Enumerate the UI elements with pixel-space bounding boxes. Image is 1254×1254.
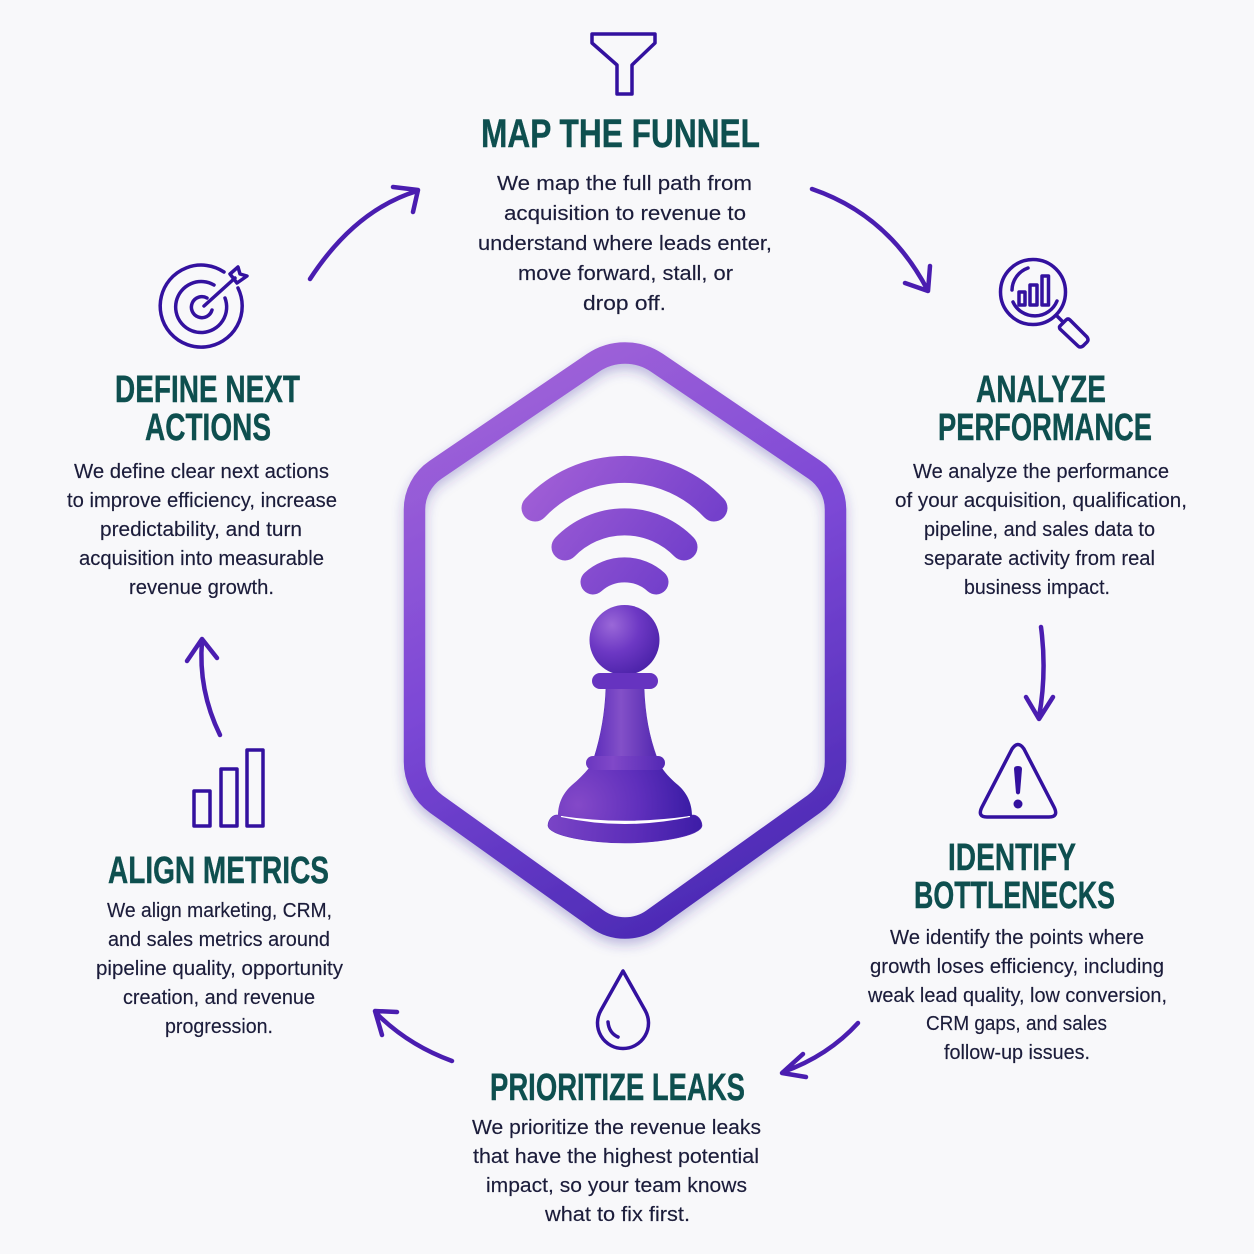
- text: analyze performance: separate activity from real: [924, 547, 1155, 570]
- text: align metrics: [96, 899, 344, 1038]
- text: identify bottlenecks: follow-up issues.: [944, 1041, 1090, 1064]
- text: map the funnel: drop off.: [583, 292, 666, 315]
- heading: identify bottlenecks: [914, 837, 1115, 917]
- text: map the funnel: move forward, stall, or: [518, 262, 733, 285]
- text: prioritize leaks: what to fix first.: [544, 1203, 690, 1226]
- text: align metrics: We align marketing, CRM,: [107, 899, 332, 922]
- heading: define next actions: DEFINE NEXT: [115, 369, 300, 411]
- icon: target with arrow: [160, 265, 247, 347]
- text: analyze performance: business impact.: [964, 576, 1110, 599]
- arrow: identify to prioritize: [782, 1023, 858, 1077]
- icon: funnel: [592, 34, 655, 94]
- icon: chess pawn: [548, 605, 702, 843]
- text: align metrics: creation, and revenue: [123, 986, 315, 1009]
- text: define next actions: predictability, and turn: [100, 518, 302, 541]
- text: identify bottlenecks: [867, 926, 1167, 1064]
- heading: map the funnel: MAP THE FUNNEL: [481, 112, 760, 156]
- text: map the funnel: understand where leads enter,: [478, 232, 772, 255]
- text: define next actions: acquisition into measurable: [79, 547, 324, 570]
- text: prioritize leaks: that have the highest potential: [473, 1145, 759, 1168]
- text: map the funnel: [478, 172, 772, 315]
- text: identify bottlenecks: growth loses efficiency, including: [870, 955, 1164, 978]
- heading: analyze performance: ANALYZE: [976, 369, 1106, 411]
- icon: magnifier with bars: [1000, 260, 1088, 347]
- text: prioritize leaks: [472, 1116, 761, 1226]
- icon: bar chart: [194, 750, 263, 826]
- text: analyze performance: of your acquisition, qualification,: [895, 489, 1187, 512]
- heading: identify bottlenecks: BOTTLENECKS: [914, 875, 1115, 917]
- heading: identify bottlenecks: IDENTIFY: [948, 837, 1076, 879]
- icon: wifi signal arcs: [535, 469, 714, 582]
- text: define next actions: [67, 460, 337, 599]
- arrow: funnel to analyze: [812, 189, 930, 291]
- text: align metrics: progression.: [165, 1015, 273, 1038]
- icon: water drop: [598, 971, 648, 1049]
- text: prioritize leaks: impact, so your team knows: [486, 1174, 747, 1197]
- arrow: align to define: [187, 639, 220, 735]
- heading: align metrics: ALIGN METRICS: [108, 850, 329, 892]
- text: analyze performance: pipeline, and sales data to: [924, 518, 1155, 541]
- text: identify bottlenecks: We identify the points where: [890, 926, 1144, 949]
- text: align metrics: and sales metrics around: [108, 928, 330, 951]
- heading: define next actions: ACTIONS: [145, 407, 271, 449]
- arrow: define to map: [310, 187, 418, 279]
- icon: warning triangle: [980, 744, 1056, 817]
- text: define next actions: revenue growth.: [129, 576, 274, 599]
- text: prioritize leaks: We prioritize the revenue leaks: [472, 1116, 761, 1139]
- central hexagon frame: [414, 353, 836, 928]
- text: identify bottlenecks: CRM gaps, and sales: [926, 1012, 1107, 1035]
- heading: analyze performance: [938, 369, 1152, 449]
- heading: analyze performance: PERFORMANCE: [938, 407, 1152, 449]
- text: map the funnel: acquisition to revenue to: [504, 202, 746, 225]
- text: identify bottlenecks: weak lead quality, low conversion,: [867, 984, 1167, 1007]
- text: align metrics: pipeline quality, opportunity: [96, 957, 344, 980]
- heading: prioritize leaks: PRIORITIZE LEAKS: [490, 1067, 745, 1109]
- text: analyze performance: We analyze the performance: [913, 460, 1169, 483]
- arrow: analyze to identify: [1026, 627, 1053, 719]
- text: define next actions: We define clear next actions: [74, 460, 329, 483]
- text: define next actions: to improve efficiency, increase: [67, 489, 337, 512]
- arrow: prioritize to align: [375, 1011, 452, 1061]
- text: analyze performance: [895, 460, 1187, 599]
- text: map the funnel: We map the full path from: [497, 172, 752, 195]
- heading: define next actions: [115, 369, 300, 449]
